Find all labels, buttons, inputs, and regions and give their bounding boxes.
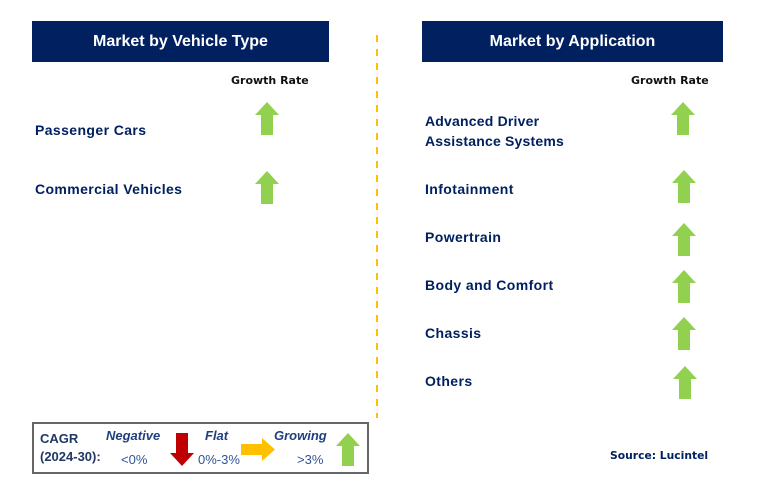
label: commercial vehicles: Commercial Vehicles <box>35 181 182 197</box>
column label: growth rate right: Growth Rate <box>631 74 709 87</box>
label: advanced driver assistance systems: Assistance Systems <box>425 133 564 149</box>
label: powertrain: Powertrain <box>425 229 501 245</box>
legend: cagr key <box>32 422 369 474</box>
legend range: above 3%: >3% <box>297 452 323 467</box>
legend title: (2024-30): <box>40 449 101 464</box>
icon: green up arrow <box>336 433 360 466</box>
legend title: CAGR <box>40 431 78 446</box>
legend label: growing: Growing <box>274 428 327 443</box>
heading: market by vehicle type <box>32 21 329 62</box>
heading: market by application: Market by Application <box>490 33 655 50</box>
icon: growth arrow powertrain <box>672 223 696 256</box>
legend range: 0% to 3%: 0%-3% <box>198 452 240 467</box>
icon: growth arrow others <box>673 366 697 399</box>
label: infotainment: Infotainment <box>425 181 514 197</box>
legend label: flat: Flat <box>205 428 228 443</box>
legend range: below 0%: <0% <box>121 452 147 467</box>
label: body and comfort: Body and Comfort <box>425 277 554 293</box>
label: advanced driver assistance systems <box>425 113 564 149</box>
icon: growth arrow infotainment <box>672 170 696 203</box>
icon: growth arrow body and comfort <box>672 270 696 303</box>
icon: yellow right arrow <box>241 438 275 461</box>
icon: red down arrow <box>170 433 194 466</box>
label: chassis: Chassis <box>425 325 482 341</box>
icon: growth arrow commercial vehicles <box>255 171 279 204</box>
icon: growth arrow chassis <box>672 317 696 350</box>
label: advanced driver assistance systems: Advanced Driver <box>425 113 539 129</box>
label: passenger cars: Passenger Cars <box>35 122 146 138</box>
dashed divider <box>376 35 378 418</box>
legend title <box>40 431 101 464</box>
heading: market by vehicle type: Market by Vehicle Type <box>93 33 268 50</box>
icon: growth arrow adas <box>671 102 695 135</box>
heading: market by application <box>422 21 723 62</box>
column label: growth rate left: Growth Rate <box>231 74 309 87</box>
source note: Source: Lucintel <box>610 449 708 462</box>
icon: growth arrow passenger cars <box>255 102 279 135</box>
legend label: negative: Negative <box>106 428 160 443</box>
label: others: Others <box>425 373 473 389</box>
